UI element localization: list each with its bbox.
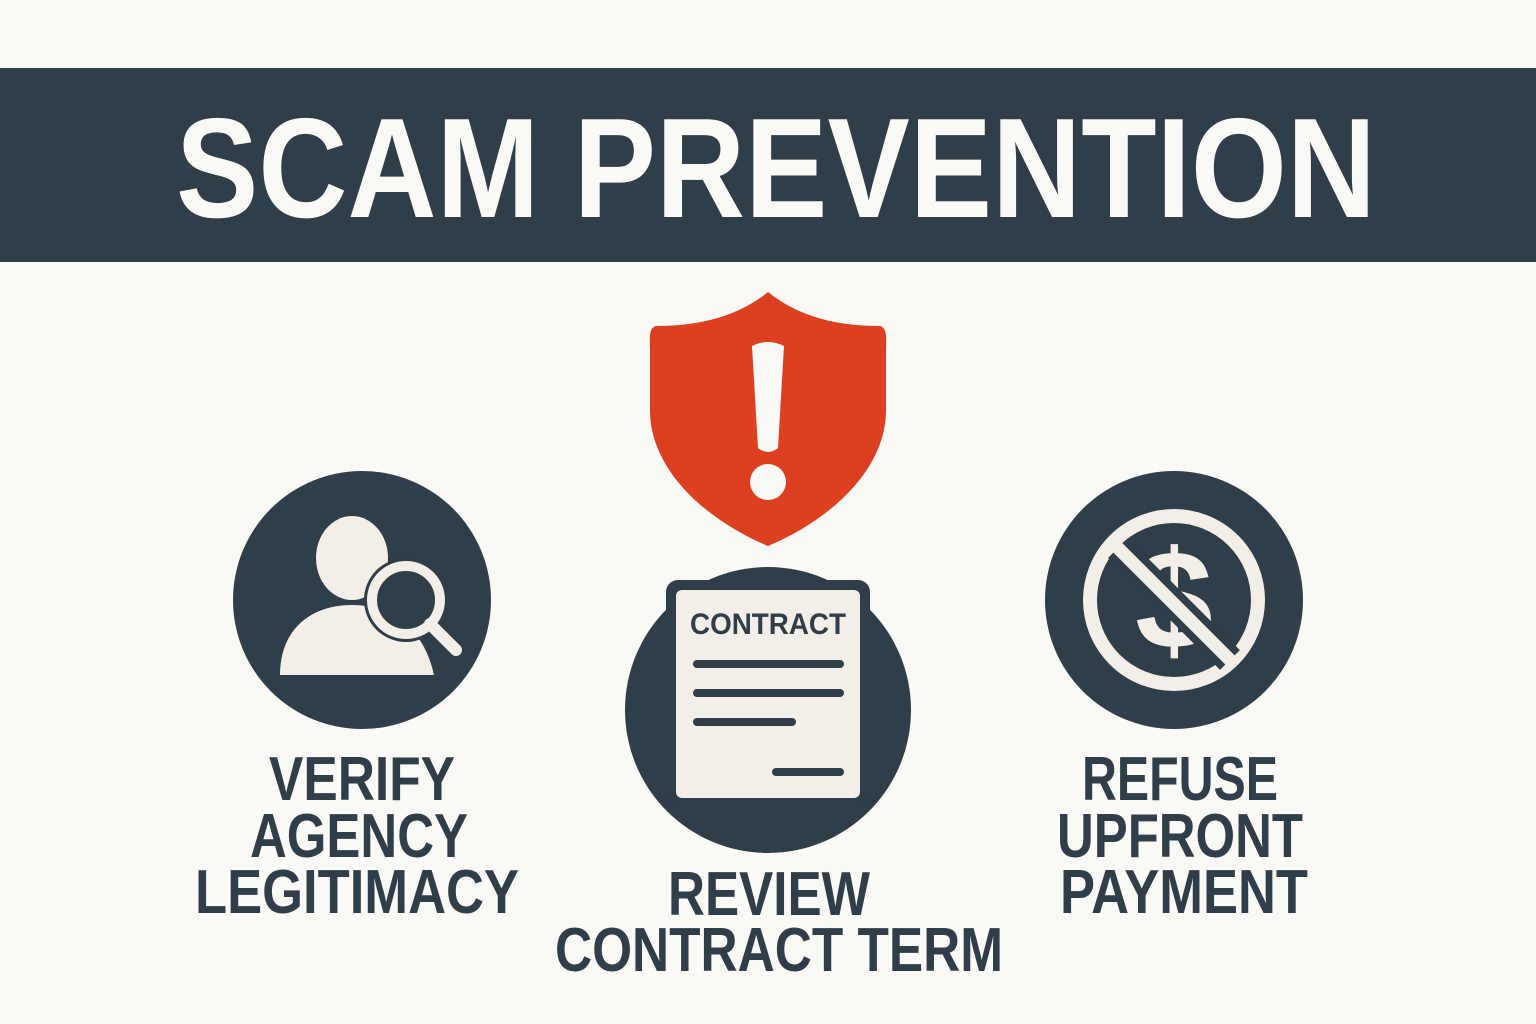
title banner: SCAM PREVENTION: [176, 89, 1376, 248]
label: review contract term: [555, 860, 1003, 985]
label: refuse upfront payment: PAYMENT: [1060, 858, 1308, 927]
icon: warning shield: [650, 292, 886, 546]
icon: contract document: CONTRACT: [690, 608, 846, 641]
label: refuse upfront payment: REFUSE: [1082, 745, 1278, 814]
label: verify agency legitimacy: LEGITIMACY: [195, 858, 519, 927]
label: verify agency legitimacy: VERIFY: [269, 745, 455, 814]
label: review contract term: CONTRACT TERM: [555, 916, 1003, 985]
icon: no upfront payment: [1045, 471, 1303, 729]
label: refuse upfront payment: [1057, 745, 1308, 927]
label: verify agency legitimacy: AGENCY: [250, 802, 468, 871]
icon: no upfront payment: $: [1135, 521, 1213, 678]
icon: contract document: [625, 567, 911, 853]
label: refuse upfront payment: UPFRONT: [1057, 802, 1303, 871]
label: review contract term: REVIEW: [668, 860, 870, 929]
label: verify agency legitimacy: [195, 745, 519, 927]
icon: verify agency (person with magnifier): [233, 471, 491, 729]
